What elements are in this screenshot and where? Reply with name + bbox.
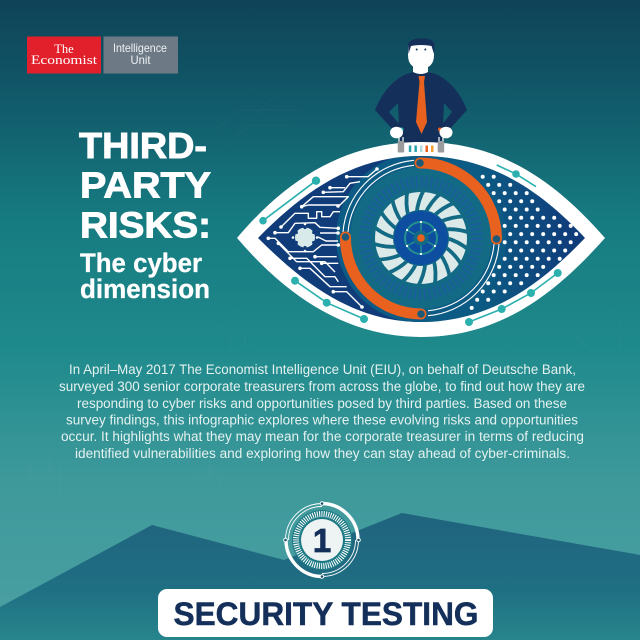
- badge centre: [301, 519, 343, 561]
- badge dots: [284, 502, 360, 578]
- eye outer white shape: [237, 142, 605, 337]
- circuit traces: [268, 169, 377, 307]
- intro paragraph: surveyed 300 senior corporate treasurers from across the globe, to find out how they are: [59, 379, 585, 394]
- subtitle line one: The cyber: [80, 248, 202, 278]
- iris outer band: [336, 153, 506, 323]
- circuit board left side: [266, 167, 379, 309]
- man body and arms: [375, 72, 467, 146]
- logo grey block: Unit: [130, 53, 151, 67]
- man hands: [390, 127, 452, 138]
- card heading: SECURITY TESTING: [174, 596, 478, 632]
- iris teal disc: [350, 167, 492, 309]
- back mountain silhouette: [0, 513, 640, 640]
- intro paragraph: responding to cyber risks and opportunities posed by third parties. Based on these: [77, 396, 567, 411]
- man hair: [408, 38, 434, 54]
- man head: [408, 43, 434, 69]
- logo: The Economist Intelligence Unit: [27, 36, 178, 74]
- title line three: RISKS:: [80, 204, 211, 246]
- title line one: THIRD-: [79, 125, 207, 166]
- orange arc bottom left: [342, 233, 425, 318]
- colour bars: [409, 146, 434, 152]
- circuit gear chip: [292, 223, 318, 252]
- intro paragraph: [59, 362, 585, 461]
- iris: [342, 159, 500, 318]
- eye dark blue sclera left: [258, 156, 420, 322]
- intro paragraph: occur. It highlights what they may mean for the corporate treasurer in terms of reducing: [61, 429, 584, 444]
- section number badge: [284, 502, 360, 578]
- intro paragraph: survey findings, this infographic explores where these evolving risks and opportunities: [66, 412, 578, 428]
- faint circuit background pattern: [30, 95, 620, 500]
- padlocks and colour bars on the eyelid: [398, 137, 444, 152]
- disc under blades: [374, 190, 468, 286]
- logo red block: Economist: [31, 52, 97, 67]
- badge numeral: 1: [313, 522, 331, 559]
- dotted right panel: [472, 177, 576, 308]
- eye interior: [258, 156, 585, 322]
- badge inner teal: [292, 510, 352, 570]
- logo grey block: [104, 36, 178, 74]
- man neck: [413, 64, 428, 74]
- subtitle line two: dimension: [80, 274, 210, 304]
- accent top left: [260, 177, 319, 224]
- intro paragraph: identified vulnerabilities and exploring how they can stay ahead of cyber-criminals.: [75, 446, 570, 461]
- eye blue sclera right: [425, 156, 585, 322]
- man eyes: [416, 48, 426, 50]
- badge thin ring arcs: [286, 504, 358, 576]
- badge ticks: [296, 514, 348, 566]
- intro paragraph: In April–May 2017 The Economist Intelligence Unit (EIU), on behalf of Deutsche Bank,: [69, 362, 576, 377]
- thin ring arcs: [343, 160, 499, 316]
- logo grey block: Intelligence: [113, 41, 167, 55]
- teal accent lines on the white band: [260, 165, 561, 325]
- man cuffs: [400, 128, 442, 132]
- card background: [158, 589, 493, 637]
- logo red block: [27, 36, 101, 74]
- section heading card: [158, 589, 493, 637]
- blade separators: [372, 189, 470, 287]
- turbine blades: [384, 201, 458, 275]
- icon: businessman standing on eye: [375, 38, 467, 146]
- title: [79, 125, 211, 304]
- circuit end dots: [266, 167, 379, 309]
- accent bottom right: [466, 270, 561, 325]
- man tie: [416, 76, 427, 134]
- logo red block: The: [54, 42, 74, 56]
- pupil: [394, 211, 448, 265]
- padlock right: [438, 137, 444, 152]
- orange arc top right: [416, 159, 500, 243]
- mountains: [0, 513, 640, 640]
- badge thick arcs: [286, 504, 358, 576]
- iris tick burst: [365, 182, 477, 294]
- accent top right: [497, 165, 536, 187]
- title line two: PARTY: [80, 164, 211, 206]
- padlock left: [398, 137, 404, 152]
- accent bottom left: [292, 278, 367, 322]
